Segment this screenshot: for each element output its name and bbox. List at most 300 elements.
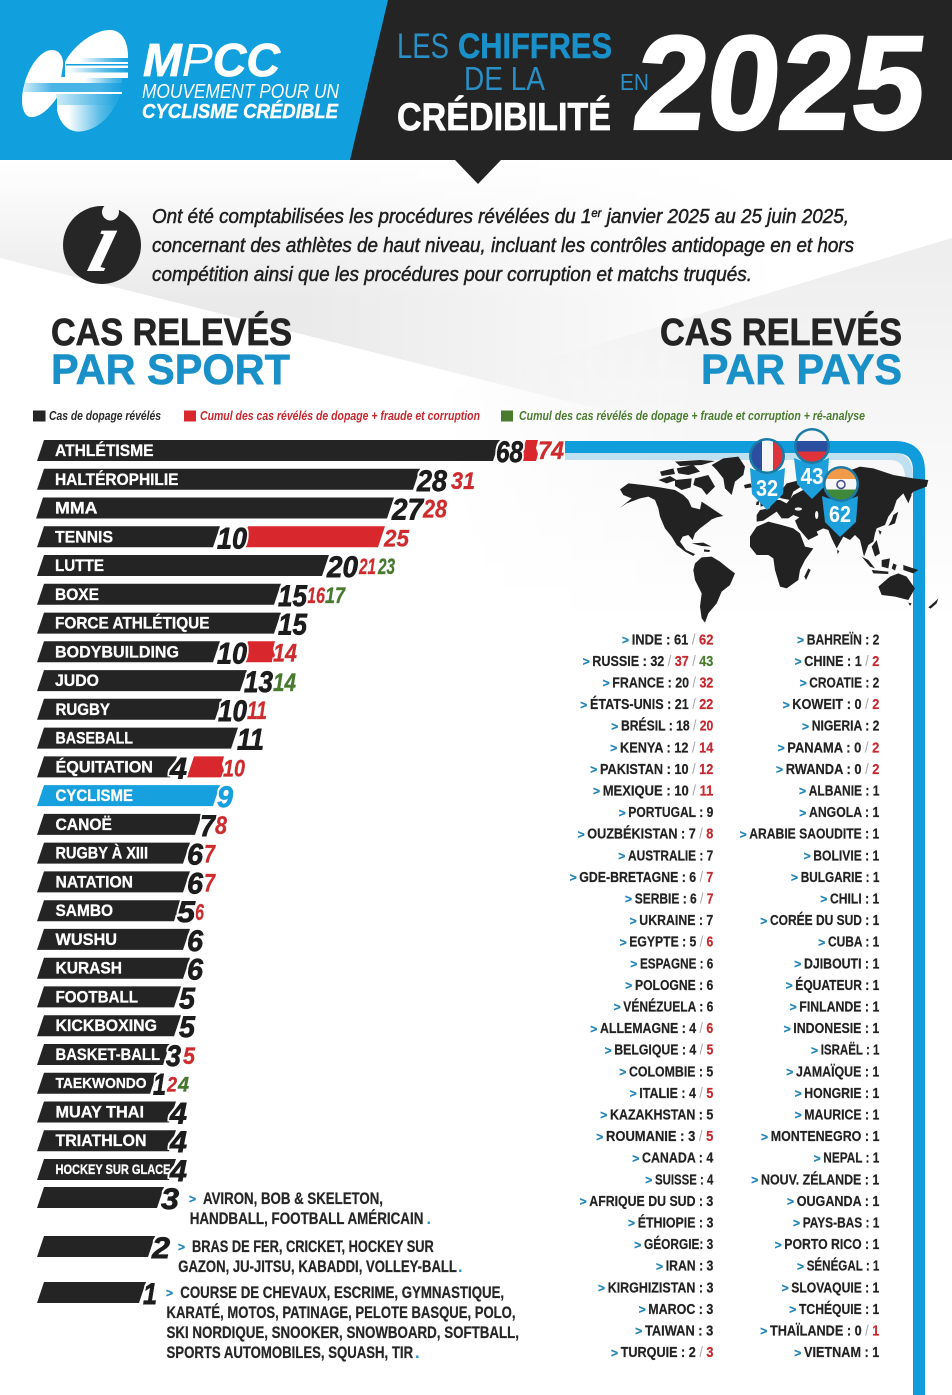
bar: Judo: JUDO [55, 671, 99, 690]
list: countries column 2: NEPAL : 1 [823, 1151, 879, 1167]
list: countries column 1: > [619, 806, 626, 820]
heading: par sport: PAR SPORT [51, 346, 290, 394]
bar: Basket-ball [37, 1040, 196, 1073]
bar: Lutte [37, 551, 395, 584]
list: sports with 3 cases: . [426, 1210, 431, 1228]
bar: Cyclisme: CYCLISME [56, 786, 133, 805]
list: countries column 2: MAURICE : 1 [804, 1108, 879, 1124]
list: countries column 2: CHILI : 1 [830, 892, 879, 908]
legend [33, 409, 865, 423]
list: countries column 2: > [760, 1324, 767, 1338]
list: countries column 1: > [583, 655, 590, 669]
bar: MMA [36, 494, 447, 526]
bar: Taekwondo: 1 [153, 1069, 166, 1102]
blue frame [565, 447, 919, 1395]
bar: Baseball: 11 [237, 724, 264, 757]
list: countries column 1: INDE : 61 / 62 [632, 632, 713, 648]
bar: Lutte: 23 [377, 554, 395, 579]
list: countries column 1: TAIWAN : 3 [645, 1324, 713, 1340]
list: countries column 2: VIETNAM : 1 [804, 1345, 879, 1361]
list: countries column 2: > [795, 1108, 802, 1122]
list: sports with 2 cases: . [458, 1258, 463, 1276]
bar: Boxe: 16 [307, 583, 326, 608]
list: countries column 2: > [797, 1259, 804, 1273]
year 2025: 2025 [626, 7, 935, 158]
bar: Force athlétique [37, 609, 308, 642]
list: countries column 1: > [645, 1173, 652, 1187]
list: countries column 2: INDONESIE : 1 [793, 1021, 879, 1037]
list: sports with 3 cases: > [189, 1192, 196, 1206]
bar: Tennis: 25 [383, 525, 410, 552]
list: countries column 1: > [625, 979, 632, 993]
header title: LES [397, 27, 449, 66]
bar: Rugby [37, 695, 267, 728]
list: countries column 1: > [639, 1303, 646, 1317]
list: countries column 1: RUSSIE : 32 / 37 / 43 [592, 654, 713, 670]
list: countries column 2: CORÉE DU SUD : 1 [770, 912, 879, 929]
list: countries column 2: PANAMA : 0 / 2 [787, 740, 879, 756]
header title: DE LA [464, 60, 545, 97]
list: countries column 1: > [593, 784, 600, 798]
list: countries column 1: SUISSE : 4 [655, 1172, 713, 1188]
list: countries column 1: > [603, 676, 610, 690]
pin: India 62 [822, 466, 859, 537]
logo wordmark: MPCC [143, 34, 281, 86]
bar: 3 cases: 3 [161, 1183, 179, 1216]
list: countries column 2: > [795, 655, 802, 669]
list: countries column 1: SERBIE : 6 / 7 [635, 892, 713, 908]
list: countries column 1: KIRGHIZISTAN : 3 [608, 1280, 713, 1296]
bar: Athlétisme: 68 [496, 436, 523, 469]
bar: Judo [37, 666, 296, 699]
bar: Judo: 14 [273, 669, 296, 697]
list: countries column 2: THAÏLANDE : 0 / 1 [770, 1322, 879, 1340]
list: countries column 1 [570, 632, 713, 1361]
heading: par pays: CAS RELEVÉS [660, 310, 902, 354]
list: countries column 2: PAYS-BAS : 1 [803, 1216, 879, 1232]
list: sports with 3 cases: AVIRON, BOB & SKELETON, [203, 1190, 383, 1208]
bar: Rugby à XIII: 6 [187, 839, 203, 872]
list: countries column 1: UKRAINE : 7 [639, 913, 713, 929]
list: countries column 1: ITALIE : 4 / 5 [639, 1086, 713, 1102]
list: countries column 2: CUBA : 1 [828, 935, 879, 951]
bar: Boxe: 17 [325, 583, 346, 608]
list: countries column 1: FRANCE : 20 / 32 [612, 676, 713, 692]
bar: MMA: 28 [422, 496, 447, 524]
world map [619, 457, 938, 623]
list: countries column 2: PORTO RICO : 1 [784, 1237, 879, 1253]
list: countries column 1: ROUMANIE : 3 / 5 [606, 1129, 713, 1145]
bar: Boxe: BOXE [55, 585, 99, 604]
bar: Triathlon: 4 [169, 1126, 187, 1159]
bar: Bodybuilding: 10 [217, 637, 247, 670]
list: countries column 1: > [596, 1130, 603, 1144]
list: countries column 2: > [789, 1303, 796, 1317]
list: sports with 2 cases [178, 1238, 463, 1276]
bar: Rugby à XIII: 7 [204, 841, 216, 869]
list: countries column 1: > [578, 827, 585, 841]
bar: Force athlétique: FORCE ATHLÉTIQUE [55, 614, 210, 633]
bar: Muay Thai: MUAY THAI [56, 1102, 144, 1122]
list: countries column 1: GÉORGIE: 3 [644, 1236, 713, 1253]
bar: Football: 5 [179, 982, 196, 1015]
list: countries column 2: ISRAËL : 1 [821, 1042, 879, 1059]
bar: Tennis [37, 522, 410, 555]
bar: Wushu: 6 [187, 925, 203, 958]
pin: France 32 [749, 438, 785, 510]
list: countries column 1: MEXIQUE : 10 / 11 [603, 784, 713, 800]
bar: Force athlétique: 15 [278, 609, 308, 642]
list: sports with 1 case [166, 1284, 519, 1362]
list: countries column 2: RWANDA : 0 / 2 [786, 762, 879, 778]
list: countries column 1: > [590, 763, 597, 777]
bar: Basket-ball: BASKET-BALL [56, 1045, 160, 1064]
list: sports with 1 case: SKI NORDIQUE, SNOOKER, SNOWBOARD, SOFTBALL, [166, 1324, 519, 1342]
list: countries column 2: > [740, 827, 747, 841]
list: countries column 1: > [619, 1065, 626, 1079]
page background [0, 214, 952, 434]
list: countries column 2: > [786, 1065, 793, 1079]
intro text: janvier 2025 au 25 juin 2025, [601, 206, 849, 228]
bar: Rugby à XIII: RUGBY À XIII [56, 844, 148, 863]
list: countries column 2: > [776, 763, 783, 777]
list: countries column 1: > [630, 1087, 637, 1101]
list: countries column 1: GDE-BRETAGNE : 6 / 7 [579, 870, 713, 886]
list: countries column 2: > [799, 784, 806, 798]
list: sports with 1 case: . [415, 1344, 420, 1362]
bar: Bodybuilding: 14 [273, 639, 297, 667]
list: countries column 2: > [790, 1000, 797, 1014]
list: countries column 1: AFRIQUE DU SUD : 3 [589, 1194, 713, 1210]
list: countries column 1: > [590, 1022, 597, 1036]
bar: Lutte: LUTTE [55, 556, 104, 575]
bar: Canoë: 7 [200, 810, 216, 843]
list: countries column 1: > [630, 957, 637, 971]
list: countries column 2: > [784, 1022, 791, 1036]
bar: Canoë: 8 [215, 812, 227, 840]
heading: par sport [51, 310, 292, 394]
list: sports with 1 case: COURSE DE CHEVAUX, ESCRIME, GYMNASTIQUE, [180, 1284, 504, 1302]
list: sports with 3 cases [189, 1190, 431, 1228]
list: countries column 1: > [618, 849, 625, 863]
list: countries column 2: CHINE : 1 / 2 [804, 654, 879, 670]
bar: MMA: MMA [55, 498, 98, 518]
icon: info: ı [79, 194, 132, 291]
list: countries column 1: PAKISTAN : 10 / 12 [600, 762, 713, 778]
list: countries column 2 [740, 631, 879, 1361]
list: countries column 2: TCHÉQUIE : 1 [799, 1301, 879, 1318]
bar: Canoë: CANOË [56, 815, 112, 834]
bar: Natation [37, 867, 216, 900]
list: countries column 1: > [605, 1043, 612, 1057]
bar: Hockey sur glace [37, 1155, 187, 1188]
bar: Sambo: 5 [177, 896, 196, 929]
bar: Équitation [37, 752, 246, 785]
list: countries column 2: > [787, 1195, 794, 1209]
list: countries column 1: > [622, 633, 629, 647]
header title: CRÉDIBILITÉ [397, 95, 611, 139]
list: countries column 2: ÉQUATEUR : 1 [795, 977, 879, 994]
list: countries column 1: TURQUIE : 2 / 3 [621, 1345, 713, 1361]
bar: Lutte: 20 [326, 551, 358, 584]
list: countries column 1: BRÉSIL : 18 / 20 [621, 718, 713, 735]
bar: 1 case: 1 [143, 1278, 157, 1311]
list: countries column 2: SLOVAQUIE : 1 [791, 1280, 879, 1296]
list: countries column 2: BAHREÏN : 2 [807, 631, 879, 648]
list: countries column 1: > [632, 1151, 639, 1165]
bar: Football: FOOTBALL [56, 987, 138, 1006]
intro text: compétition ainsi que les procédures pour corruption et matchs truqués. [152, 264, 752, 286]
bar: Rugby: 10 [218, 695, 247, 728]
pin: Russia 43: 43 [800, 463, 824, 489]
list: countries column 2: ANGOLA : 1 [809, 805, 879, 821]
bar: Lutte: 21 [358, 554, 376, 579]
list: countries column 2: ARABIE SAOUDITE : 1 [749, 827, 879, 843]
list: countries column 1: COLOMBIE : 5 [629, 1064, 713, 1080]
bar: Équitation: ÉQUITATION [56, 757, 153, 776]
bar: Haltérophilie: 28 [416, 465, 447, 498]
list: countries column 1: > [600, 1108, 607, 1122]
header blue panel [0, 0, 388, 160]
list: countries column 2: SÉNÉGAL : 1 [807, 1258, 879, 1275]
bar: Muay Thai: 4 [169, 1098, 187, 1130]
bar: Sambo: SAMBO [56, 901, 113, 920]
bar: Basket-ball: 5 [183, 1043, 196, 1070]
list: countries column 2: > [804, 849, 811, 863]
list: countries column 1: > [611, 1346, 618, 1360]
list: countries column 1: VÉNÉZUELA : 6 [623, 998, 713, 1016]
bar: Football [37, 982, 196, 1015]
pin: France 32: 32 [756, 475, 778, 501]
list: countries column 2: JAMAÏQUE : 1 [796, 1063, 879, 1080]
intro text: concernant des athlètes de haut niveau, incluant les contrôles antidopage en et hors [152, 235, 854, 257]
bar: Rugby à XIII [37, 839, 216, 872]
header title [397, 27, 649, 139]
bar: 2 cases [37, 1232, 170, 1265]
bar: Tennis: 10 [217, 522, 247, 555]
list: countries column 1: > [580, 698, 587, 712]
bar: Hockey sur glace: HOCKEY SUR GLACE [56, 1162, 170, 1177]
list: countries column 1: EGYPTE : 5 / 6 [629, 935, 713, 951]
list: countries column 1: > [630, 914, 637, 928]
header title: EN [620, 69, 649, 95]
list: countries column 1: > [635, 1324, 642, 1338]
list: countries column 2: > [761, 1130, 768, 1144]
list: countries column 2: > [814, 1151, 821, 1165]
list: countries column 2: KOWEIT : 0 / 2 [792, 697, 879, 713]
list: sports with 1 case: KARATÉ, MOTOS, PATINAGE, PELOTE BASQUE, POLO, [166, 1303, 516, 1322]
list: countries column 2: > [794, 957, 801, 971]
bar: Kickboxing: 5 [179, 1011, 196, 1044]
list: countries column 1: KAZAKHSTAN : 5 [610, 1108, 713, 1124]
list: countries column 1: KENYA : 12 / 14 [620, 740, 713, 756]
list: countries column 2: > [760, 914, 767, 928]
intro text: er [591, 206, 602, 220]
bar: Baseball: BASEBALL [56, 729, 133, 748]
list: countries column 1: CANADA : 4 [642, 1151, 713, 1167]
bar: Boxe: 15 [278, 580, 308, 613]
bar: MMA: 27 [391, 494, 424, 526]
list: countries column 2: > [818, 935, 825, 949]
bar: Rugby: 11 [247, 697, 267, 725]
heading: par pays [660, 310, 902, 394]
bar: Haltérophilie: HALTÉROPHILIE [55, 470, 178, 489]
list: countries column 2: HONGRIE : 1 [804, 1086, 879, 1102]
bar: Basket-ball: 3 [166, 1040, 181, 1073]
list: countries column 2: > [797, 633, 804, 647]
header title: CHIFFRES [458, 27, 612, 66]
bar: Judo: 13 [244, 666, 273, 699]
list: countries column 1: ÉTATS-UNIS : 21 / 22 [590, 696, 713, 713]
bar: Équitation: 4 [169, 752, 187, 785]
list: countries column 2: ALBANIE : 1 [809, 784, 879, 800]
intro text [152, 206, 854, 286]
bar: Kickboxing [37, 1011, 196, 1044]
list: sports with 1 case: > [166, 1286, 173, 1300]
list: countries column 2: > [791, 871, 798, 885]
logo wordmark [142, 34, 339, 123]
bar: Taekwondo: 2 [166, 1074, 177, 1097]
list: countries column 2: DJIBOUTI : 1 [804, 956, 879, 972]
bar: Natation: 6 [187, 867, 203, 900]
list: countries column 1: > [625, 892, 632, 906]
bar: Athlétisme [37, 436, 564, 469]
list: sports with 2 cases: BRAS DE FER, CRICKET, HOCKEY SUR [192, 1238, 434, 1256]
list: countries column 2: NIGERIA : 2 [812, 719, 879, 735]
heading: par sport: CAS RELEVÉS [51, 310, 292, 354]
bar: Kickboxing: KICKBOXING [56, 1016, 157, 1035]
list: countries column 1: ALLEMAGNE : 4 / 6 [600, 1021, 713, 1037]
header dark panel [340, 0, 952, 184]
bar: Natation: 7 [204, 869, 216, 897]
header [0, 0, 952, 184]
intro text: Ont été comptabilisées les procédures révélées du 1 [152, 206, 618, 228]
list: countries column 2: FINLANDE : 1 [799, 1000, 879, 1016]
list: countries column 2: NOUV. ZÉLANDE : 1 [761, 1171, 879, 1188]
list: countries column 2: BOLIVIE : 1 [813, 848, 879, 864]
bar: Tennis: TENNIS [55, 527, 113, 546]
bar: Kurash: KURASH [56, 959, 122, 978]
list: countries column 2: > [786, 979, 793, 993]
legend: Cas de dopage révélés [49, 409, 161, 423]
list: countries column 1: OUZBÉKISTAN : 7 / 8 [587, 826, 713, 843]
list: countries column 2: > [802, 719, 809, 733]
legend: Cumul des cas révélés de dopage + fraude et corruption + ré-analyse [519, 409, 865, 423]
bar: Équitation: 10 [223, 755, 246, 782]
bar: Kurash [37, 954, 203, 987]
list: countries column 1: ÉTHIOPIE : 3 [638, 1214, 713, 1232]
bar: Athlétisme: ATHLÉTISME [55, 441, 154, 460]
bar: Triathlon: TRIATHLON [56, 1131, 146, 1150]
bar: Taekwondo [37, 1069, 189, 1102]
logo mark [22, 30, 128, 132]
list: countries column 2: > [799, 806, 806, 820]
list: countries column 1: POLOGNE : 6 [635, 978, 713, 994]
bar: Kurash: 6 [187, 954, 203, 987]
list: countries column 1: > [580, 1195, 587, 1209]
list: countries column 1: > [611, 719, 618, 733]
bar: Taekwondo: 4 [177, 1074, 189, 1097]
list: countries column 2: > [751, 1173, 758, 1187]
logo wordmark: CYCLISME CRÉDIBLE [142, 100, 339, 123]
bar: Natation: NATATION [56, 872, 133, 891]
bar: Sambo [37, 896, 204, 929]
bar: Cyclisme [37, 781, 233, 814]
bar: Hockey sur glace: 4 [169, 1155, 187, 1188]
list: countries column 2: > [820, 892, 827, 906]
bar: Sambo: 6 [195, 899, 204, 925]
pin: India 62: 62 [829, 501, 851, 527]
bar: Canoë [37, 810, 227, 843]
list: countries column 1: > [656, 1259, 663, 1273]
list: countries column 2: BULGARIE : 1 [801, 870, 879, 886]
list: countries column 2: > [800, 676, 807, 690]
list: countries column 1: ESPAGNE : 6 [640, 956, 713, 972]
bar: Haltérophilie: 31 [451, 468, 475, 495]
bar: Rugby: RUGBY [56, 700, 111, 719]
bar: 1 case [37, 1278, 157, 1311]
icon: info [63, 194, 141, 291]
list: countries column 2: OUGANDA : 1 [797, 1194, 879, 1210]
list: countries column 2: CROATIE : 2 [809, 676, 879, 692]
bar: Muay Thai [37, 1098, 187, 1130]
bar: Triathlon [37, 1126, 187, 1159]
list: countries column 1: > [614, 1000, 621, 1014]
list: countries column 2: > [775, 1238, 782, 1252]
bar: Boxe [37, 580, 346, 613]
list: countries column 2: > [811, 1043, 818, 1057]
list: countries column 2: > [783, 698, 790, 712]
heading: par pays: PAR PAYS [701, 346, 902, 394]
bar: Bodybuilding [37, 637, 297, 670]
list: countries column 1: AUSTRALIE : 7 [628, 848, 713, 864]
list: countries column 1: > [620, 935, 627, 949]
pin: Russia 43 [794, 428, 830, 499]
list: countries column 2: > [793, 1216, 800, 1230]
list: countries column 1: PORTUGAL : 9 [628, 805, 713, 821]
bar: Taekwondo: TAEKWONDO [56, 1075, 147, 1092]
bar: 3 cases [37, 1183, 179, 1216]
list: countries column 1: > [610, 741, 617, 755]
bar: Haltérophilie [37, 465, 475, 498]
legend: Cumul des cas révélés de dopage + fraude et corruption [200, 409, 480, 423]
list: sports with 2 cases: GAZON, JU-JITSU, KABADDI, VOLLEY-BALL [178, 1258, 457, 1276]
list: countries column 1: > [570, 871, 577, 885]
bar: Wushu: WUSHU [56, 930, 117, 949]
bar chart: cases by sport [36, 436, 564, 1311]
list: countries column 1: MAROC : 3 [648, 1302, 713, 1318]
list: countries column 2: > [782, 1281, 789, 1295]
list: countries column 2: > [795, 1087, 802, 1101]
bar: Athlétisme: 74 [538, 437, 564, 465]
bar: Baseball [37, 724, 264, 757]
list: sports with 3 cases: HANDBALL, FOOTBALL AMÉRICAIN [190, 1209, 423, 1228]
bar: Bodybuilding: BODYBUILDING [55, 642, 179, 661]
list: countries column 1: > [598, 1281, 605, 1295]
list: countries column 1: > [634, 1238, 641, 1252]
list: countries column 1: > [628, 1216, 635, 1230]
bar: Cyclisme: 9 [217, 781, 233, 814]
list: sports with 2 cases: > [178, 1240, 185, 1254]
logo wordmark: MOUVEMENT POUR UN [142, 81, 339, 103]
list: countries column 2: > [794, 1346, 801, 1360]
list: countries column 2: MONTENEGRO : 1 [771, 1129, 879, 1145]
list: countries column 2: > [778, 741, 785, 755]
list: sports with 1 case: SPORTS AUTOMOBILES, SQUASH, TIR [166, 1344, 413, 1362]
bar: Wushu [37, 925, 203, 958]
list: countries column 1: BELGIQUE : 4 / 5 [614, 1043, 713, 1059]
bar: 2 cases: 2 [151, 1232, 170, 1265]
